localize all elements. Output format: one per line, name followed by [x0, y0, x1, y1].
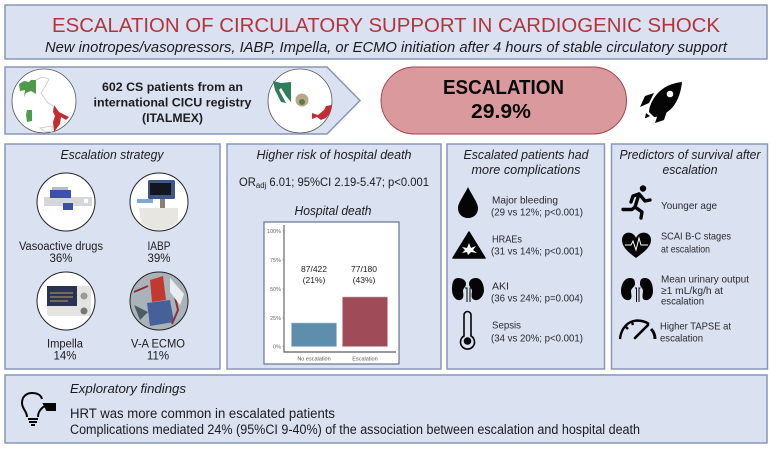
icon: light bulb	[22, 393, 55, 425]
item: major bleeding	[491, 194, 583, 218]
heading: Predictors of survival after	[620, 147, 761, 162]
panel: higher risk of hospital death	[227, 144, 441, 369]
icon: rocket	[640, 82, 682, 123]
bar chart: 50%	[270, 287, 281, 293]
registry arrow panel	[5, 67, 360, 134]
item: SCAI stages: at escalation	[661, 244, 710, 256]
label: Impella	[47, 338, 84, 362]
icon: running person	[623, 185, 650, 218]
item: TAPSE: escalation	[660, 332, 703, 344]
panel: exploratory findings	[5, 375, 767, 443]
label: vasoactive drugs: 36%	[49, 253, 73, 265]
icon: thermometer	[461, 312, 475, 349]
exploratory finding one: HRT was more common in escalated patients	[70, 406, 335, 421]
bar: no escalation: No escalation	[297, 356, 331, 362]
bar: escalation: Escalation	[352, 356, 378, 362]
item: AKI: AKI	[492, 280, 509, 292]
item: urinary output: Mean urinary output	[661, 274, 749, 286]
exploratory heading: Exploratory findings	[70, 381, 187, 396]
icon: IABP console	[130, 173, 188, 231]
odds ratio: OR	[239, 177, 256, 189]
bar chart: 75%	[270, 258, 281, 264]
item: TAPSE: Higher TAPSE at	[660, 320, 731, 332]
item: SCAI stages	[661, 230, 731, 256]
icon: V-A ECMO photo	[130, 272, 188, 330]
bar: escalation: 77/180	[351, 264, 377, 274]
chart title: Hospital death	[294, 203, 372, 218]
item: HRAEs: HRAEs	[492, 234, 522, 246]
icon: heart with pulse	[622, 233, 651, 258]
exploratory finding two: Complications mediated 24% (95%CI 9-40%) of the association between escalation and hospital death	[70, 422, 640, 437]
bar chart: 100%	[267, 229, 281, 235]
registry text: 602 CS patients from an	[102, 80, 243, 94]
header panel	[5, 5, 767, 59]
icon: Mexico map	[268, 69, 332, 133]
bar chart: 0%	[273, 344, 281, 350]
heading	[620, 147, 761, 177]
bar: escalation	[342, 264, 388, 362]
item: urinary output: escalation	[661, 296, 704, 308]
label: Impella: Impella	[47, 338, 84, 350]
icon: explosion hazard	[453, 232, 485, 258]
heading: Escalated patients had	[464, 147, 589, 162]
icon: Italy map	[12, 69, 76, 133]
icon: kidneys	[452, 278, 484, 302]
panel: complications	[447, 144, 604, 369]
item: TAPSE	[660, 320, 731, 344]
heading: escalation	[662, 162, 718, 177]
escalation pill	[381, 67, 626, 134]
escalation pill: ESCALATION	[443, 77, 564, 99]
icon: blood drop	[458, 187, 478, 218]
icon: Impella controller	[37, 272, 95, 330]
item: sepsis: (34 vs 20%; p<0.001)	[491, 332, 583, 344]
escalation pill: 29.9%	[471, 101, 531, 123]
item: sepsis: Sepsis	[492, 320, 521, 332]
odds ratio: 6.01; 95%CI 2.19-5.47; p<0.001	[266, 177, 429, 189]
item: HRAEs: (31 vs 14%; p<0.001)	[491, 246, 583, 258]
heading	[464, 147, 589, 177]
bar: escalation: (43%)	[353, 275, 375, 285]
bar: no escalation: 87/422	[301, 264, 327, 274]
item: urinary output: ≥1 mL/kg/h at	[661, 285, 723, 297]
bar chart: 25%	[270, 316, 281, 322]
item: sepsis	[491, 320, 583, 344]
title: ESCALATION OF CIRCULATORY SUPPORT IN CARDIOGENIC SHOCK	[52, 14, 720, 37]
label: IABP	[147, 241, 171, 265]
odds ratio: adj	[256, 181, 266, 190]
item: AKI	[491, 280, 583, 304]
item: younger age: Younger age	[661, 200, 717, 212]
label: V-A ECMO: 11%	[147, 350, 169, 362]
item: major bleeding: Major bleeding	[492, 194, 558, 206]
registry text	[94, 80, 252, 125]
panel: escalation strategy	[5, 144, 220, 369]
registry text: (ITALMEX)	[142, 111, 203, 125]
label: V-A ECMO: V-A ECMO	[131, 338, 185, 350]
item: AKI: (36 vs 24%; p=0.004)	[491, 292, 583, 304]
item: urinary output	[661, 274, 749, 308]
bar: no escalation	[292, 264, 336, 362]
heading: Escalation strategy	[60, 147, 165, 162]
icon: vasoactive drug pump	[37, 173, 95, 231]
icon: kidneys	[621, 278, 653, 302]
heading: more complications	[472, 162, 581, 177]
bar chart	[264, 222, 399, 364]
label: IABP: IABP	[148, 241, 171, 253]
panel: predictors of survival	[612, 144, 768, 369]
item: SCAI stages: SCAI B-C stages	[661, 230, 731, 242]
item: major bleeding: (29 vs 12%; p<0.001)	[491, 206, 583, 218]
subtitle: New inotropes/vasopressors, IABP, Impella, or ECMO initiation after 4 hours of stable circulatory support	[45, 40, 728, 56]
label: Impella: 14%	[53, 350, 77, 362]
heading: Higher risk of hospital death	[256, 147, 412, 162]
label: vasoactive drugs: Vasoactive drugs	[19, 241, 103, 253]
registry text: international CICU registry	[94, 96, 252, 110]
icon: speedometer	[620, 320, 655, 339]
bar: no escalation: (21%)	[303, 275, 325, 285]
label: vasoactive drugs	[19, 241, 103, 265]
label: IABP: 39%	[147, 253, 171, 265]
item: HRAEs	[491, 234, 583, 258]
label: V-A ECMO	[131, 338, 185, 362]
